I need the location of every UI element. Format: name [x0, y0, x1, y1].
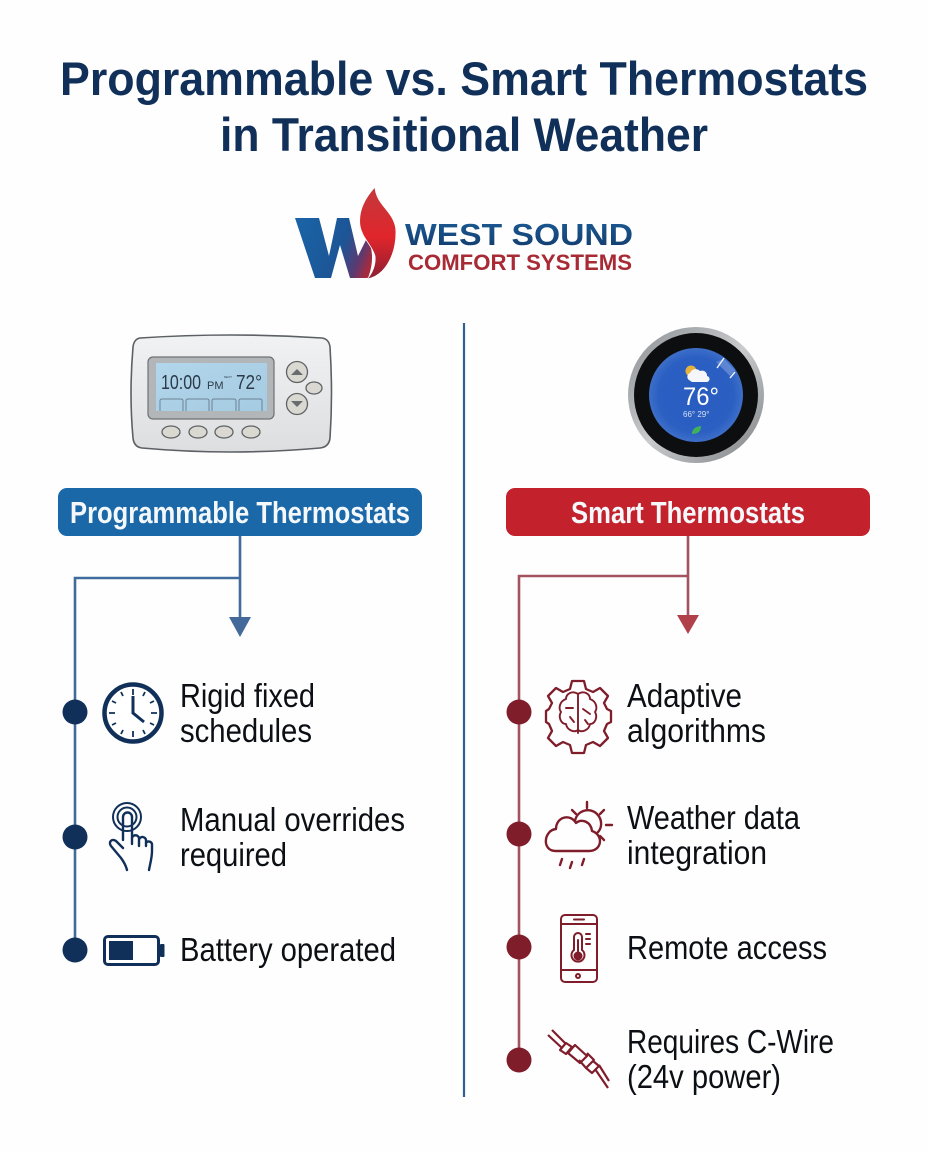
item: manual overrides required: required	[180, 836, 287, 873]
illustration: programmable thermostat: PM	[207, 380, 224, 392]
item: adaptive algorithms	[506, 677, 766, 753]
connector arrow	[519, 536, 699, 1060]
heading pill: Programmable Thermostats	[58, 488, 422, 536]
illustration: smart thermostat: 76°	[683, 383, 719, 411]
item: weather data integration: Weather data	[627, 799, 801, 836]
illustration: programmable thermostat: 72°	[236, 372, 262, 394]
item: adaptive algorithms: Adaptive	[627, 677, 742, 714]
item: weather data integration: integration	[627, 834, 767, 871]
icon: clock	[104, 684, 162, 742]
item: adaptive algorithms: algorithms	[627, 712, 766, 749]
item: remote access	[506, 915, 827, 982]
heading pill: Smart Thermostats: Smart Thermostats	[571, 495, 805, 530]
item: requires C-Wire	[506, 1023, 834, 1095]
icon: cloud with sun and rain	[546, 802, 612, 868]
item: manual overrides required	[62, 801, 405, 873]
illustration: smart thermostat	[628, 327, 764, 463]
logo wordmark: WEST SOUND	[405, 217, 633, 252]
icon: wire connector	[548, 1030, 609, 1088]
logo wordmark	[405, 217, 633, 275]
illustration: programmable thermostat: NEXT	[224, 375, 232, 379]
item: weather data integration	[506, 799, 801, 871]
logo wordmark: COMFORT SYSTEMS	[408, 250, 632, 275]
title: Programmable vs. Smart Thermostats	[60, 52, 868, 105]
item: battery operated: Battery operated	[180, 931, 396, 968]
item: rigid fixed schedules: Rigid fixed	[180, 677, 315, 714]
panel: smart thermostats	[506, 327, 870, 1095]
center divider	[463, 323, 465, 1097]
item: rigid fixed schedules	[62, 677, 315, 749]
title	[60, 52, 868, 161]
illustration: smart thermostat: 66° 29°	[683, 410, 709, 419]
logo mark: flame	[360, 187, 396, 279]
connector arrow	[75, 536, 251, 950]
item: manual overrides required: Manual overrides	[180, 801, 405, 838]
icon: gear with brain	[546, 681, 611, 753]
item: requires C-Wire: (24v power)	[627, 1058, 781, 1095]
illustration: programmable thermostat: 10:00	[161, 372, 201, 394]
item: remote access: Remote access	[627, 929, 827, 966]
logo mark: W	[295, 218, 372, 278]
panel: programmable thermostats	[58, 335, 422, 968]
heading pill: Smart Thermostats	[506, 488, 870, 536]
icon: battery	[104, 936, 164, 964]
item: rigid fixed schedules: schedules	[180, 712, 312, 749]
logo: West Sound Comfort Systems	[295, 187, 633, 279]
icon: phone with thermometer	[561, 915, 597, 982]
illustration: programmable thermostat	[131, 335, 332, 452]
item: battery operated	[62, 931, 396, 968]
heading pill: Programmable Thermostats: Programmable Thermostats	[70, 495, 410, 530]
icon: touch hand	[110, 803, 152, 870]
item: requires C-Wire: Requires C-Wire	[627, 1023, 834, 1060]
title: in Transitional Weather	[220, 108, 708, 161]
